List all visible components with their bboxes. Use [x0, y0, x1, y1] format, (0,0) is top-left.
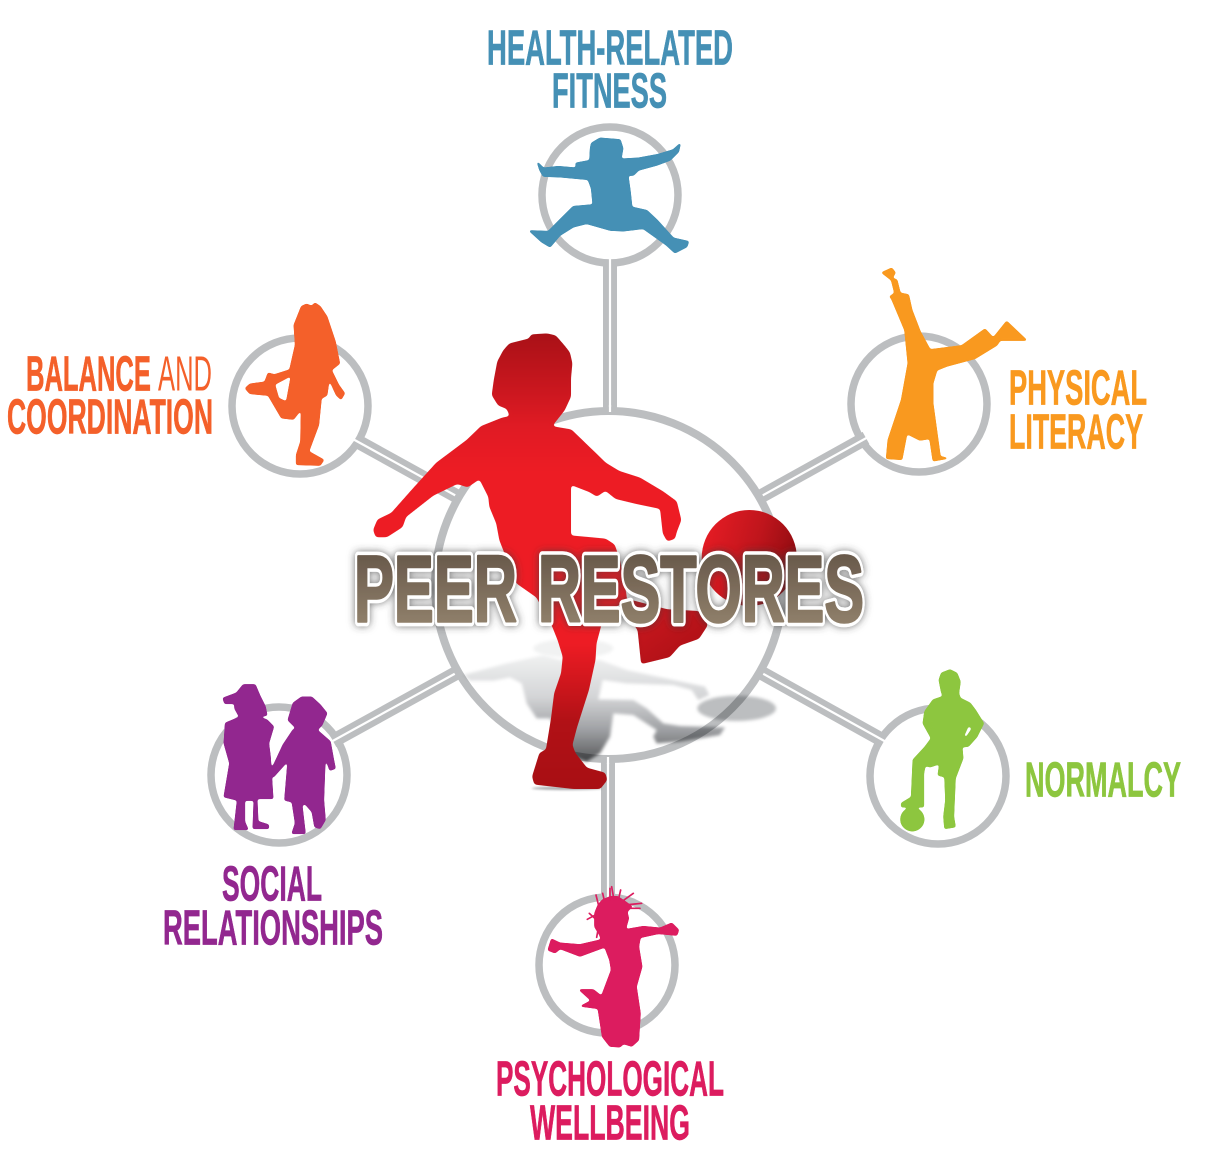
- panel: social relationships: [163, 672, 458, 956]
- icon: two children holding hands: [223, 685, 335, 833]
- panel: central hub: [354, 334, 864, 790]
- icon: boy with foot on ball: [901, 670, 983, 831]
- heading: social relationships: [163, 858, 383, 956]
- panel: physical literacy: [758, 268, 1147, 498]
- heading: balance and coordination: BALANCE AND: [26, 348, 212, 402]
- heading: health-related fitness: FITNESS: [552, 64, 667, 118]
- title: peer restores: [354, 536, 864, 642]
- title: peer restores: PEER: [354, 536, 517, 642]
- icon: leaping girl: [548, 887, 678, 1047]
- heading: health-related fitness: HEALTH-RELATED: [487, 22, 733, 76]
- panel: normalcy: [760, 670, 1181, 844]
- title: peer restores: RESTORES: [538, 536, 864, 642]
- heading: balance and coordination: COORDINATION: [7, 390, 213, 444]
- heading: balance and coordination: [7, 348, 213, 444]
- heading: psychological wellbeing: [496, 1052, 724, 1150]
- shadow of child on ground: [463, 639, 776, 790]
- heading: psychological wellbeing: WELLBEING: [530, 1096, 690, 1150]
- title: peer restores: PEER: [354, 536, 517, 642]
- icon: cartwheeling child: [882, 268, 1026, 461]
- heading: psychological wellbeing: PSYCHOLOGICAL: [496, 1052, 724, 1106]
- heading: health-related fitness: [487, 22, 733, 118]
- heading: physical literacy: [1009, 362, 1147, 460]
- panel: health-related fitness: [487, 22, 733, 408]
- title: peer restores: RESTORES: [538, 536, 864, 642]
- icon: girl balancing on one leg: [246, 303, 344, 465]
- panel: balance and coordination: [7, 303, 460, 498]
- heading: social relationships: RELATIONSHIPS: [163, 902, 383, 956]
- panel: psychological wellbeing: [496, 760, 724, 1150]
- icon: child kicking a ball: [374, 334, 797, 788]
- icon: jumping child: [530, 138, 688, 253]
- heading: social relationships: SOCIAL: [222, 858, 322, 912]
